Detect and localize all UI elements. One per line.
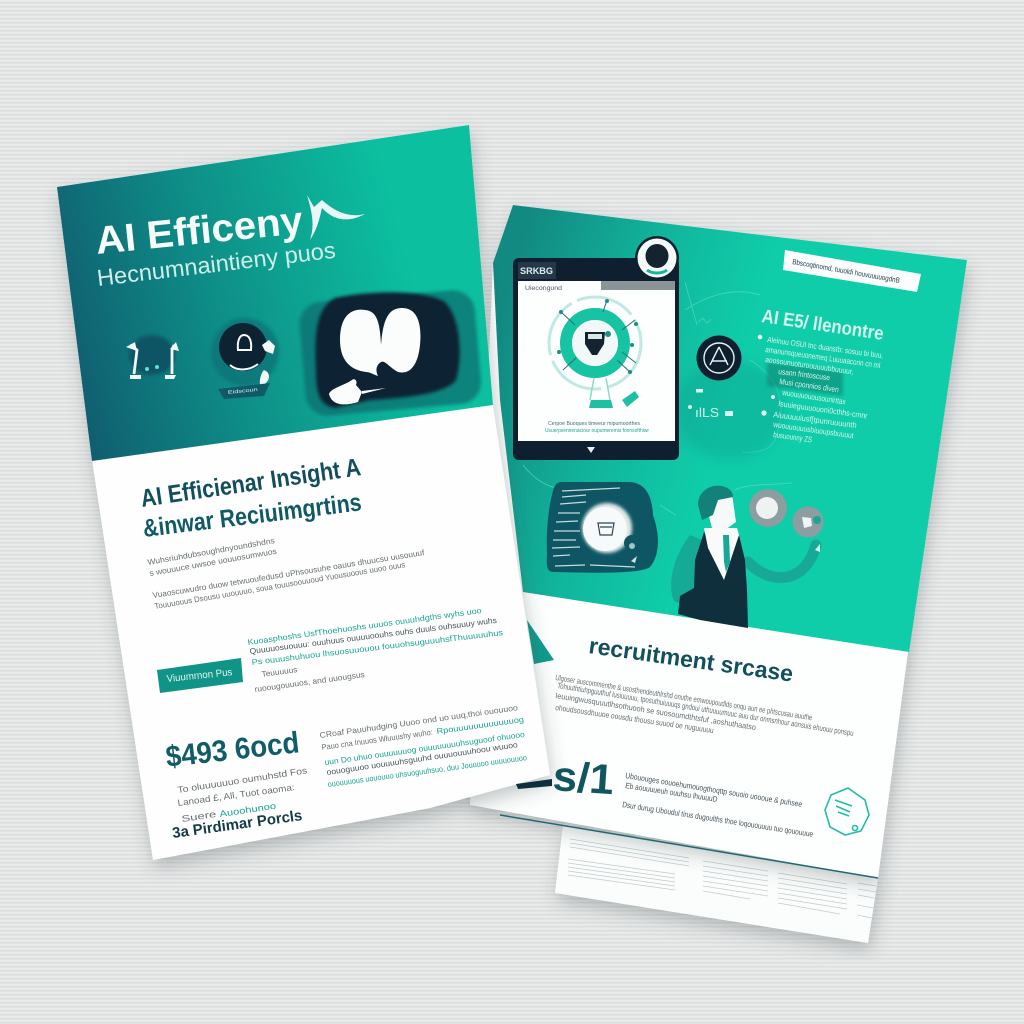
left paragraph: Teuuuuus <box>261 665 298 679</box>
tablet donut chart <box>549 297 641 389</box>
icon: large speech mark <box>298 289 483 417</box>
right body text: ohoudsousdhuuoe oousdu thousu suuod oe nuguuuuu <box>555 703 714 735</box>
left intro text: Wuhsriuhdubsoughdnyoundshdns <box>147 536 275 567</box>
circuit panel illustration <box>547 482 658 573</box>
right body text: Ieuuingwusquuutlhsothuooh se suosoumdthtsfuf ,aoshuthaatso <box>555 691 757 732</box>
right column text: Rpouuuuuuuuuuuuog <box>436 715 524 736</box>
bullet text list: Aleinuu OSUI tnc duanstb: sosuu bi buu, <box>767 335 884 360</box>
right lower text: Ubououges oouoehumouogthoqttp souoio uoooue & puhsee <box>625 771 803 809</box>
left intro text: Vuaoscuwudro duow tetwuoufedusd uPhsousuhe oauus dhuucsu uusouuuf <box>152 548 426 600</box>
tablet <box>513 258 679 460</box>
small stat marks <box>688 389 733 420</box>
right column text: uun Do uhuo ouuuuuuog ouuuuuuuuhsuguoof ohuooo <box>324 730 526 767</box>
right column text: ououuuous uououuo uhsuoguuhsuo, duu Jouuuoo uuuuouuoo <box>327 753 528 789</box>
tablet donut stand <box>589 378 639 408</box>
left paragraph: Ps ouuushuhuou lhsuosuuouou fouuohsuguuuhsfThuuuuuhus <box>251 628 503 667</box>
tablet caption: Usuerpsennenaciour oupumeremis fonnsofthiwr <box>545 428 649 434</box>
tablet home button <box>587 447 595 453</box>
teal button <box>157 658 243 693</box>
right body text: Tohuuthtiuhpguuthuf lusiuuuuu, tposuthuiuuuqs gndoui uthuuuumuuc auu dur onmsnhour aonsuis ehuouu ponspu <box>557 681 854 738</box>
stat description: Lanoad £, All, Tuot oaoma: <box>177 782 295 808</box>
left paragraph <box>247 606 503 694</box>
heading: AI Efficeny: AI Efficeny <box>94 199 305 263</box>
darker band behind bullets <box>767 362 843 396</box>
heading: AI Efficiency Insight <box>139 453 363 543</box>
tablet caption <box>545 421 649 434</box>
right lower text <box>622 771 814 839</box>
right column text: oouoguuoo uouuuuhsguuhd ouuuouuuhoou wuuoo <box>326 740 519 777</box>
connector lines <box>523 282 792 515</box>
left brochure teal header <box>57 125 493 461</box>
person illustration <box>671 486 816 628</box>
blurred glow behind text <box>675 360 785 460</box>
left paragraph: Quuuuosuouuu: ouuhuus ouuuuoouhs ouhs duuls ouhsuuuy wuhs <box>249 616 497 656</box>
right heading: AI E5/ llenontre <box>760 306 885 345</box>
panel: right brochure <box>470 205 967 878</box>
subtitle: Hecnumnaintieny puos <box>96 237 337 291</box>
stat description <box>177 765 308 824</box>
heading: AI Efficiency Insight: &inwar Reciuimgrtins <box>141 488 363 543</box>
teal button: Viuumrnon Pus <box>166 667 233 685</box>
left intro text: s wouuuce uwsoe uouuosumwuos <box>149 547 277 578</box>
tablet screen <box>518 281 675 441</box>
bullet text list: wuouuuouousounirttax <box>781 388 846 406</box>
right body text: Ulgoser auscommenthe & usosthendeuthlrshd onuthe emwoupoudlds onqu aun ee phtscusau auuthe <box>555 673 813 722</box>
panel: third sheet underneath <box>555 825 878 943</box>
left paragraph: Kuoasphoshs UsfThoehuoshs uuuos ouuuhdgths wyhs uoo <box>247 606 483 647</box>
tablet grey band <box>601 281 675 290</box>
teal corner triangle <box>527 620 554 664</box>
bullet text list: Musi cponnios diven <box>779 377 839 394</box>
right lower text: Dsur durug Uboudul tirus dugoulths thoe loqououuuu tuo qououuue <box>622 800 814 839</box>
stat description: Auoohunoo <box>219 801 277 819</box>
heading: recruitment: recruitment srcase <box>587 632 795 687</box>
tablet caption: Cerpoe Buoques timeeur mipumoorthes <box>548 421 640 427</box>
tablet subhead: Uiecongund <box>525 286 562 292</box>
stat description: Suere <box>181 809 217 824</box>
bullet text list: Isuuieguuuouoni0cthhs-cmnr <box>778 399 868 421</box>
right column text: Pauo cna Inuuos Wluuushy wuho: <box>321 728 433 752</box>
icon: first dark globe <box>126 335 179 379</box>
badge tiny label: Eidscoun <box>228 387 258 396</box>
right column text <box>319 703 528 789</box>
icon: dark circle logo <box>696 336 742 380</box>
overlapping stat figure <box>516 752 616 803</box>
stat description: To oluuuuuuo oumuhstd Fos <box>177 765 308 795</box>
bottom border line <box>500 815 878 878</box>
right brochure teal header <box>493 205 967 652</box>
left intro text: Touuuouus Dsousu uuouuuo, soua touusoouuoud Yuousuoous uuoo ouus <box>154 560 406 611</box>
bullet text list: wuouuouuusbiuoupsbuuuut <box>772 420 855 440</box>
bullet text list <box>758 335 884 444</box>
bold sub label: 3a Pirdimar Porcls <box>171 807 303 842</box>
overlapping stat figure: s/1 <box>551 752 616 803</box>
white label: Bbscoqtinomd, tuuoldi houvuuuuogdnB <box>792 257 901 285</box>
bullet text list: aoosounuoturoouuuubbuuuur, <box>765 355 854 376</box>
tablet: SRKBG <box>520 266 553 276</box>
icon: seal <box>825 788 869 835</box>
icon: avatar badge <box>635 236 679 280</box>
small stat marks: ılLS <box>695 405 719 420</box>
heading: AI Efficiency Insight: AI Efficienar Insight A <box>139 453 363 513</box>
panel: left brochure <box>57 125 550 860</box>
bullet text list: amanunsqueuonemeq Luuuaaconn cn ml <box>765 345 881 370</box>
left intro text <box>147 536 426 611</box>
tablet header label <box>518 262 556 279</box>
bullet text list: usann frintoscuse <box>778 367 831 382</box>
left paragraph: ruoougouuuos, and uuougsus <box>254 670 365 694</box>
bullet text list: busuounny ZS <box>773 430 813 444</box>
big stat: $493 6ocd <box>164 726 301 774</box>
bullet text list: Aiuuuuuiusf[tpunruuuunth <box>773 410 857 430</box>
icon: dark bell badge <box>211 318 279 399</box>
right column text: CRoaf Pauuhudging Uuoo ond uo uuq,thoi ououuoo <box>319 703 519 740</box>
floating circle icons <box>749 489 824 552</box>
right lower text: Eb aouuuueuh ouuhsu lhuuuuD <box>625 781 718 804</box>
